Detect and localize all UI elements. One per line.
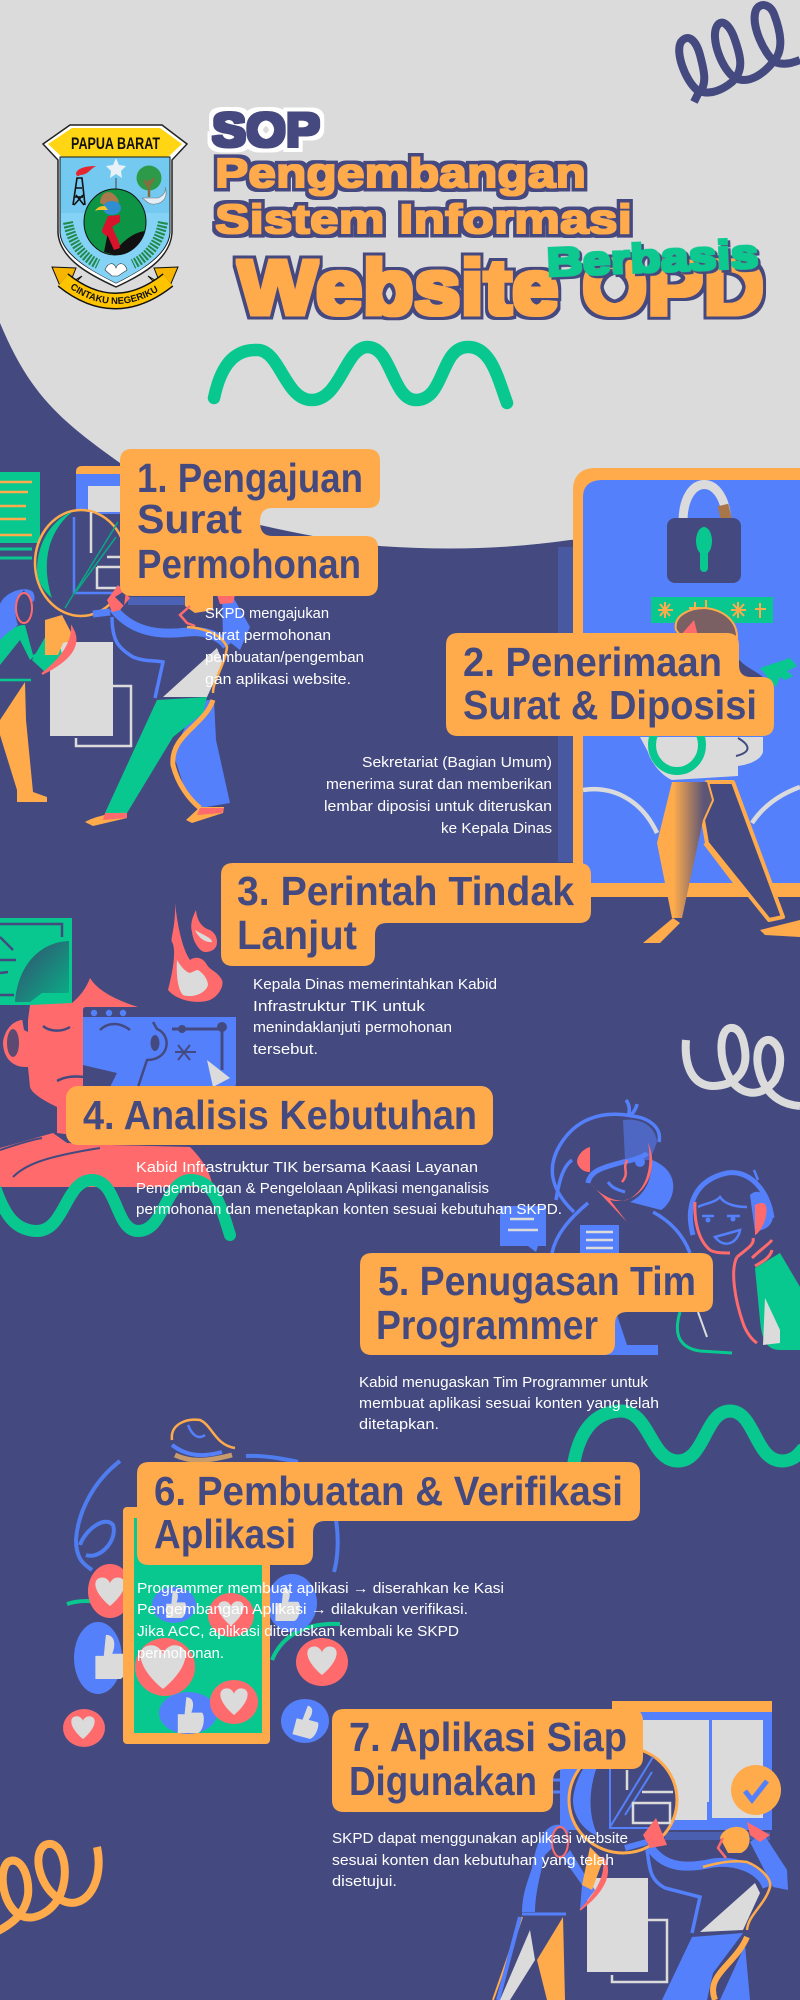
- illustration: phone with hearts and likes (step 6): [63, 1420, 348, 1747]
- flames: [168, 903, 222, 1002]
- like large left: [74, 1622, 128, 1694]
- arches: [583, 787, 800, 833]
- decoration: grey spiral: [686, 1028, 800, 1106]
- child: [677, 1170, 800, 1353]
- illustration: woman and child line art (step 5): [500, 1100, 800, 1355]
- logo: Papua Barat shield: [42, 124, 188, 310]
- step 4 description: Pengembangan & Pengelolaan Aplikasi menganalisis: [136, 1181, 489, 1197]
- step 1 description: SKPD mengajukan: [205, 606, 329, 622]
- phone: [123, 1507, 270, 1744]
- like right: [281, 1699, 329, 1743]
- step 7 heading: Digunakan: [349, 1758, 537, 1804]
- illustration: people with magnifier and dashboard (step 7): [493, 1701, 788, 2000]
- padlock: [667, 484, 741, 583]
- browser window: [76, 466, 126, 514]
- step 1 heading: [120, 449, 380, 596]
- green sprigs: [67, 1601, 340, 1660]
- step 1 description: pembuatan/pengemban: [205, 650, 364, 666]
- step 4 description: Kabid Infrastruktur TIK bersama Kaasi Layanan: [136, 1160, 478, 1176]
- step 2 description: lembar diposisi untuk diteruskan: [324, 799, 552, 815]
- step 6 description: Programmer membuat aplikasi → diserahkan ke Kasi: [137, 1581, 504, 1597]
- password bar: [651, 597, 773, 623]
- step 2 description: [324, 755, 552, 837]
- decoration: green wave right: [574, 1411, 800, 1462]
- title: [212, 103, 764, 331]
- step 5 heading: [360, 1253, 713, 1355]
- step 1 description: gan aplikasi website.: [205, 672, 351, 688]
- green frame: [0, 918, 72, 1005]
- step 2 description: Sekretariat (Bagian Umum): [362, 755, 552, 771]
- heart small left: [63, 1709, 105, 1747]
- step 1 description: surat permohonan: [205, 628, 331, 644]
- paper sheets: [587, 1878, 667, 1982]
- step 3 description: [253, 977, 497, 1058]
- step 1 description: [205, 606, 364, 688]
- check badge: [731, 1765, 781, 1815]
- red face: [0, 978, 213, 1187]
- logo: green disc with cassowary: [84, 189, 146, 255]
- step 7 heading: [332, 1709, 643, 1812]
- step 4 description: [136, 1160, 562, 1218]
- step 3 heading: Lanjut: [237, 912, 357, 958]
- title line: SOP: SOP: [212, 103, 320, 156]
- step 7 description: sesuai konten dan kebutuhan yang telah: [332, 1853, 614, 1869]
- green note: [0, 472, 40, 558]
- step 5 heading: 5. Penugasan Tim: [378, 1258, 696, 1304]
- man walking: [85, 585, 250, 826]
- step 3 heading: [221, 863, 591, 966]
- step 5 heading: Programmer: [376, 1302, 598, 1348]
- magnifier: [35, 510, 127, 616]
- step 2 heading: [446, 633, 774, 736]
- browser window: [83, 1007, 236, 1087]
- title line: Website OPD: Website OPD: [238, 245, 764, 331]
- logo title text: PAPUA BARAT: [71, 134, 160, 153]
- blue swirls: [76, 1456, 338, 1572]
- step 7 heading: 7. Aplikasi Siap: [349, 1714, 627, 1760]
- step 2 description: menerima surat dan memberikan: [326, 777, 552, 793]
- step 7 description: [332, 1831, 628, 1890]
- step 4 description: permohonan dan menetapkan konten sesuai kebutuhan SKPD.: [136, 1202, 562, 1218]
- key: [760, 658, 797, 687]
- monitor base: [600, 1315, 658, 1355]
- background: grey curved header: [0, 0, 800, 548]
- title line: Pengembangan: Pengembangan: [215, 150, 586, 196]
- heart right: [296, 1638, 348, 1686]
- step 6 description: permohonan.: [137, 1646, 224, 1662]
- man: [625, 1818, 788, 2000]
- logo: emblem items: [68, 158, 166, 276]
- step 1 heading: Permohonan: [137, 541, 361, 587]
- like right behind phone: [267, 1574, 317, 1632]
- step 7 description: disetujui.: [332, 1874, 397, 1890]
- step 6 heading: Aplikasi: [154, 1511, 296, 1557]
- heart in phone: [208, 1593, 254, 1637]
- walking person: [640, 608, 800, 943]
- step 5 description: membuat aplikasi sesuai konten yang telah: [359, 1396, 659, 1412]
- heart bottom: [210, 1680, 258, 1724]
- step 3 description: Infrastruktur TIK untuk: [253, 999, 426, 1015]
- title line: Berbasis: Berbasis: [546, 232, 759, 285]
- like bottom: [159, 1692, 217, 1734]
- decoration: green wave step 4: [0, 1180, 230, 1235]
- step 6 heading: [137, 1462, 640, 1565]
- illustration: red man with window (step 3-4): [0, 903, 236, 1187]
- step 3 heading: 3. Perintah Tindak: [237, 868, 574, 914]
- step 3 description: menindaklanjuti permohonan: [253, 1020, 452, 1036]
- logo ribbon text: CINTAKU NEGERIKU: [71, 284, 158, 304]
- step 3 description: Kepala Dinas memerintahkan Kabid: [253, 977, 497, 993]
- step 3 description: tersebut.: [253, 1042, 318, 1058]
- like in phone: [152, 1587, 196, 1623]
- title line: Sistem Informasi: Sistem Informasi: [215, 196, 632, 242]
- illustration: people with magnifier (step 1): [0, 466, 250, 826]
- illustration: locked screen and person (step 2): [558, 468, 800, 943]
- step 5 description: Kabid menugaskan Tim Programmer untuk: [359, 1375, 649, 1391]
- step 5 description: [359, 1375, 659, 1433]
- decoration: navy spiral top right: [679, 5, 800, 102]
- decoration: green wave under title: [214, 347, 507, 403]
- heart top left: [88, 1564, 132, 1618]
- woman on the left: [0, 589, 75, 802]
- paper sheets: [50, 642, 131, 746]
- document: [580, 1225, 619, 1255]
- dashboard: [553, 1701, 772, 1840]
- step 6 description: [137, 1581, 504, 1662]
- step 5 description: ditetapkan.: [359, 1417, 439, 1433]
- step 2 heading: 2. Penerimaan: [463, 639, 722, 685]
- logo ribbon: [52, 267, 178, 301]
- woman: [552, 1100, 690, 1253]
- woman: [493, 1825, 607, 2000]
- step 7 description: SKPD dapat menggunakan aplikasi website: [332, 1831, 628, 1847]
- step 6 heading: 6. Pembuatan & Verifikasi: [154, 1468, 623, 1514]
- step 6 description: Jika ACC, aplikasi diteruskan kembali ke SKPD: [137, 1624, 459, 1640]
- magnifier: [569, 1747, 677, 1853]
- step 6 description: Pengembangan Aplikasi → dilakukan verifikasi.: [137, 1602, 468, 1618]
- step 4 heading: 4. Analisis Kebutuhan: [83, 1092, 477, 1138]
- chat bubble: [500, 1206, 546, 1252]
- step 2 heading: Surat & Diposisi: [463, 682, 757, 728]
- heart large: [135, 1638, 195, 1696]
- step 1 heading: 1. Pengajuan: [137, 455, 363, 501]
- step 2 description: ke Kepala Dinas: [441, 821, 552, 837]
- step 1 heading: Surat: [137, 496, 242, 542]
- device frame: [573, 468, 800, 897]
- small person: [172, 1420, 235, 1460]
- decoration: orange spiral bottom left: [0, 1844, 99, 1932]
